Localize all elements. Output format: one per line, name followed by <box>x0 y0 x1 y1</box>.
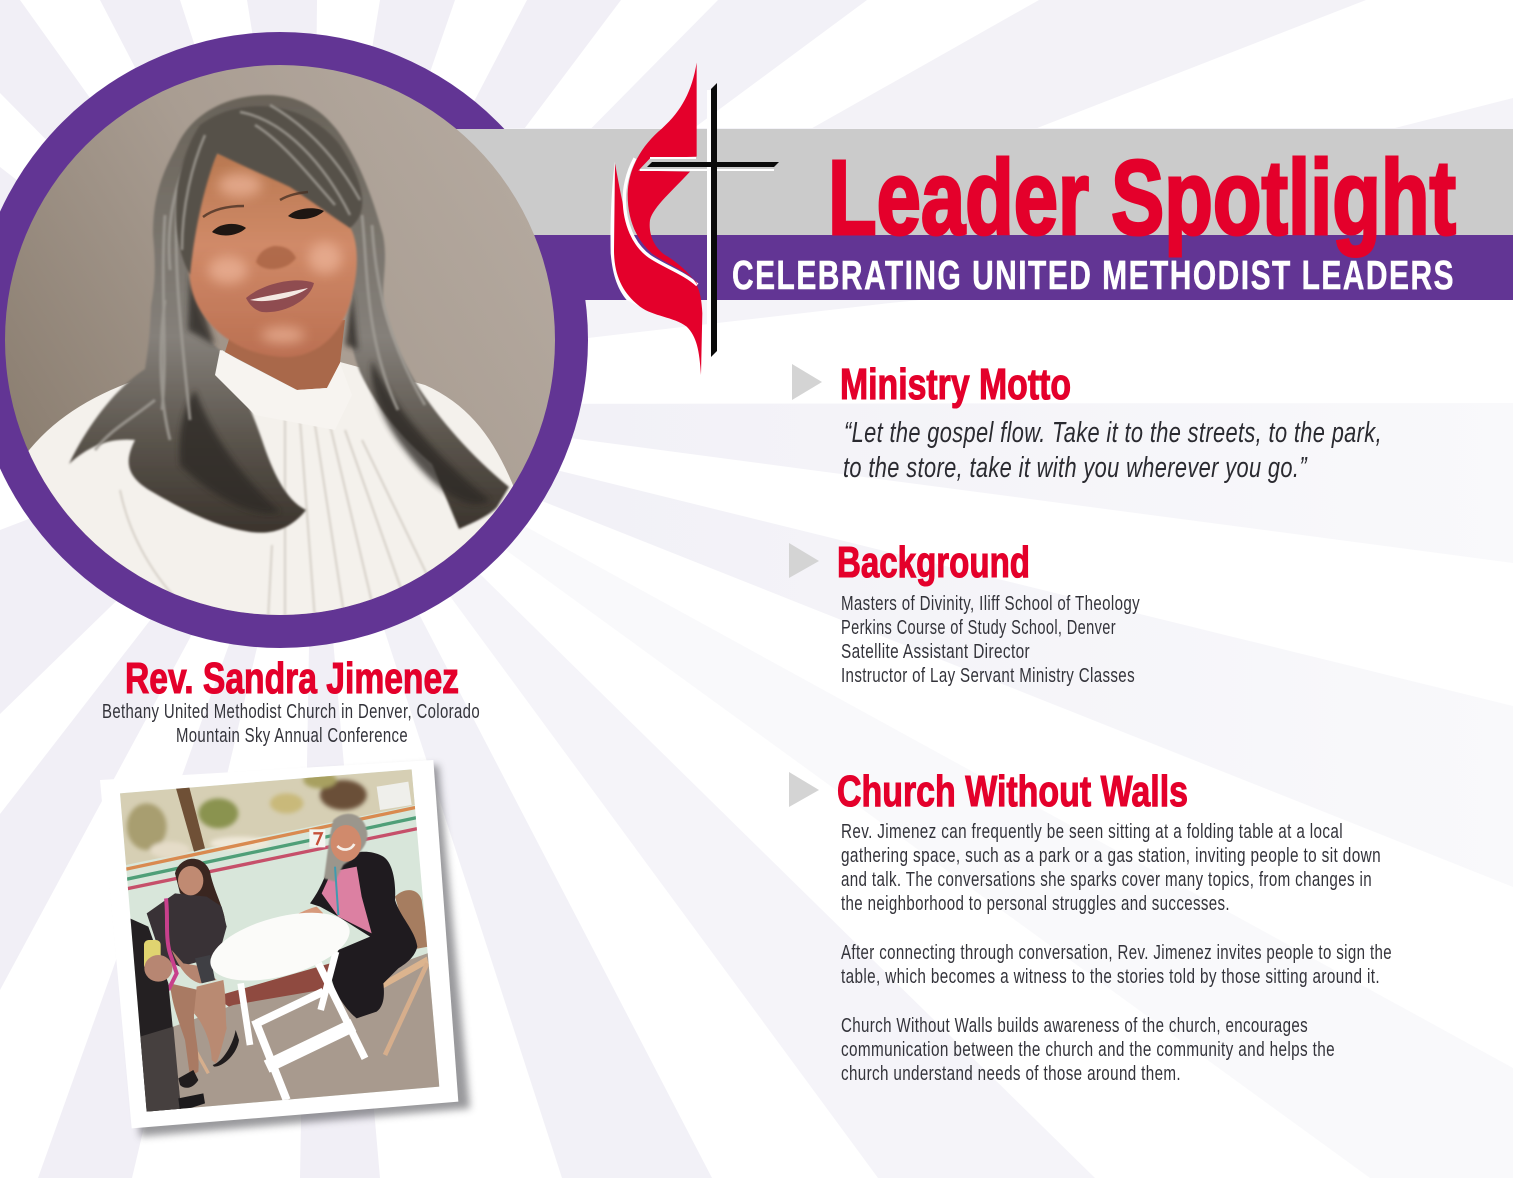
section: background <box>789 538 1140 687</box>
eyes <box>203 192 324 235</box>
wall <box>110 763 450 1117</box>
face <box>178 866 203 895</box>
heading: Church Without Walls <box>837 767 1188 816</box>
table <box>203 900 365 1100</box>
cross vertical <box>711 83 717 357</box>
name and church <box>102 654 480 747</box>
quote <box>843 417 1382 484</box>
shadow <box>110 765 470 1137</box>
body text: church understand needs of those around them. <box>841 1062 1181 1085</box>
upper flame <box>628 63 701 292</box>
smile <box>337 844 354 850</box>
white above cross arm <box>650 157 696 159</box>
photo scene <box>110 763 450 1117</box>
bangs <box>176 106 362 275</box>
white gap beside cross <box>707 90 712 356</box>
shoe <box>178 1093 205 1112</box>
forearm <box>172 950 217 983</box>
cross arm <box>647 162 779 167</box>
hair mass <box>69 95 509 533</box>
body text: the neighborhood to personal struggles and successes. <box>841 892 1230 915</box>
arrow <box>789 772 819 807</box>
pink top <box>322 867 372 933</box>
chair <box>380 890 428 1055</box>
black outfit <box>310 852 417 1018</box>
arrow <box>789 543 819 578</box>
body text: communication between the church and the community and helps the <box>841 1038 1335 1061</box>
white frame <box>100 760 458 1128</box>
left leg <box>170 983 199 1077</box>
nose <box>256 246 296 269</box>
body text <box>841 820 1392 1085</box>
right leg <box>194 980 227 1063</box>
legs <box>241 983 250 1045</box>
portrait photo <box>0 60 560 640</box>
hair <box>324 814 367 882</box>
stripes <box>125 807 417 889</box>
head <box>331 825 361 862</box>
credentials list <box>841 592 1140 687</box>
church: Bethany United Methodist Church in Denver, Colorado <box>102 700 480 723</box>
pillar <box>176 787 205 852</box>
top <box>203 900 357 994</box>
woman left <box>147 859 239 1088</box>
shirt <box>147 893 227 967</box>
brick <box>225 964 330 1007</box>
credentials list: Satellite Assistant Director <box>841 640 1030 663</box>
foreground person <box>127 918 205 1117</box>
heading: Background <box>837 538 1030 587</box>
credentials list: Perkins Course of Study School, Denver <box>841 616 1116 639</box>
face <box>189 153 357 357</box>
body text: Rev. Jimenez can frequently be seen sitting at a folding table at a local <box>841 820 1343 843</box>
ground <box>147 950 443 1115</box>
neck <box>225 320 345 390</box>
arrow <box>792 364 822 400</box>
header band: grey <box>400 129 1513 235</box>
window <box>120 769 415 865</box>
bang streaks <box>182 105 360 250</box>
hair streaks <box>93 171 426 452</box>
conference: Mountain Sky Annual Conference <box>176 724 408 747</box>
lower flame outline <box>611 162 640 307</box>
credentials list: Masters of Divinity, Iliff School of Theology <box>841 592 1140 615</box>
polaroid photo <box>100 760 470 1137</box>
dark hair shadows <box>180 270 490 513</box>
store logo <box>309 829 325 847</box>
white robe <box>28 350 514 615</box>
heading: Ministry Motto <box>840 360 1071 409</box>
photo backdrop <box>0 60 560 620</box>
lower flame <box>614 163 702 375</box>
name: Rev. Sandra Jimenez <box>125 654 459 703</box>
window blobs <box>127 772 367 858</box>
white under cross arm <box>640 169 774 171</box>
white flame separator <box>624 158 697 285</box>
body text: Church Without Walls builds awareness of the church, encourages <box>841 1014 1308 1037</box>
mouth <box>246 280 314 312</box>
cheek highlights <box>208 173 342 343</box>
pink strap <box>166 898 177 990</box>
section: church without walls <box>789 767 1392 1085</box>
credentials list: Instructor of Lay Servant Ministry Classes <box>841 664 1135 687</box>
flip flops <box>178 1030 239 1088</box>
lanyard <box>335 867 338 915</box>
cup <box>195 955 215 983</box>
bottle <box>144 940 161 970</box>
collar <box>215 350 352 430</box>
section: ministry motto <box>792 360 1382 484</box>
hand <box>144 955 172 982</box>
woman right <box>298 813 418 1018</box>
stool leg <box>198 1051 210 1074</box>
portrait ring <box>0 32 588 648</box>
logo: cross and flame <box>611 63 779 375</box>
header band: purple <box>500 235 1513 300</box>
arm and hands <box>298 906 324 914</box>
hair <box>175 859 225 920</box>
robe pleats <box>120 415 432 620</box>
poster <box>377 782 412 810</box>
quote: to the store, take it with you wherever you go.” <box>843 452 1308 484</box>
